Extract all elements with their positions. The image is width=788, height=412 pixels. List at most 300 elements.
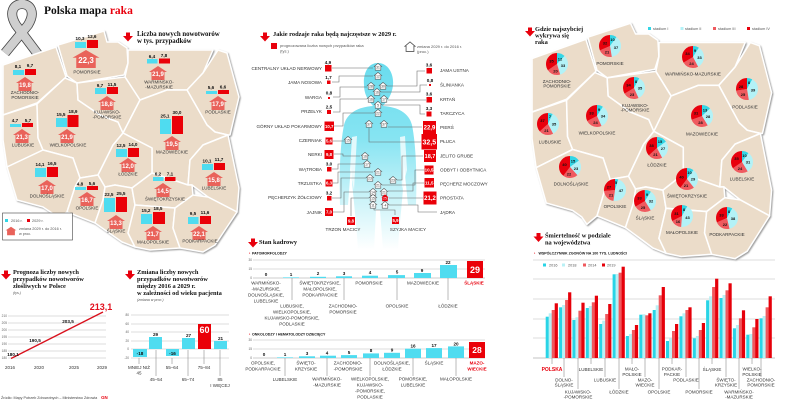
region data: Pomorskie: 22,3 (78, 56, 94, 65)
pie: Wielkopolskie: WIELKOPOLSKIE (579, 130, 615, 136)
legend: cancer types: (proc.) (417, 49, 429, 54)
region data: Świętokrzyskie: 14,5 (157, 189, 169, 195)
map regions (3, 31, 239, 252)
pie: Wielkopolskie: 9 (598, 107, 601, 112)
region data: Kujawsko-Pomorskie (93, 82, 121, 120)
pie: Kujawsko-Pomorskie: 34 (626, 82, 631, 88)
staffing chart: pathologists: 3 (343, 271, 346, 276)
staffing chart: pathologists: 4 (369, 270, 372, 275)
pie: Warmińsko-Mazurskie: 34 (685, 51, 690, 56)
legend: left map: 2029 r. (32, 219, 44, 223)
region data: Dolnośląskie (30, 161, 64, 198)
region data: Zachodniopomorskie: 8,1 (15, 64, 22, 69)
category labels: LUBELSKIE (579, 367, 603, 372)
bar chart: change by age: 20 (125, 339, 129, 343)
region data: Łódzkie: ŁÓDZKIE (118, 170, 138, 176)
left cancer list: 5,6 (326, 138, 333, 144)
heading: change by age: przypadków nowotworów (137, 276, 208, 283)
region data: Podkarpackie: 22,1 (193, 232, 205, 238)
region data: Dolnośląskie: 14,1 (36, 162, 45, 167)
pie: Dolnośląskie (554, 158, 588, 186)
pie: Śląskie: ŚLĄSKIE (636, 214, 654, 220)
category labels: LUBUSKIE (594, 378, 616, 382)
bar chart: change by age: 55–64 (166, 365, 179, 370)
region data: Zachodniopomorskie: 9,7 (27, 63, 34, 68)
region data: Podlaskie (205, 84, 231, 114)
bars: 17 voivodeship groups (546, 267, 772, 358)
region data: Lubelskie (202, 157, 226, 190)
heading: staffing: Stan kadrowy (259, 239, 298, 246)
heading: new cancers: w tys. przypadków (137, 38, 192, 45)
right cancer list: 3,6 (426, 92, 433, 96)
staffing chart: child oncologists: WARMIŃSKO- (312, 376, 342, 382)
change markers on body: 22 (376, 112, 380, 116)
pie: Zachodniopomorskie: POMORSKIE (543, 84, 571, 88)
staffing chart: pathologists: LUBELSKIE (254, 298, 278, 304)
region data: Mazowieckie: MAZOWIECKIE (156, 150, 188, 154)
region data: Podkarpackie: 11,6 (201, 210, 210, 215)
pie: Podkarpackie: PODKARPACKIE (709, 232, 745, 237)
left cancer list: 10,7 (325, 124, 334, 129)
pie: Pomorskie: 10 (610, 37, 615, 42)
region data: Zachodniopomorskie: POMORSKIE (11, 95, 39, 100)
heading: change by age (125, 269, 223, 302)
line chart: forecast: 2020 (34, 365, 45, 370)
left cancer list: TRZON MACICY (326, 227, 360, 232)
staffing chart: child oncologists: MAŁOPOLSKIE (440, 376, 472, 382)
staffing chart: child oncologists: POMORSKIE, (399, 376, 427, 382)
region data: Świętokrzyskie (145, 172, 185, 202)
pie: Łódzkie: 21 (653, 152, 658, 157)
staffing chart: child oncologists: WIECKIE (467, 366, 487, 372)
region data: Podlaskie: 6,6 (220, 84, 227, 90)
staffing chart: child oncologists: ŁÓDZKIE (382, 366, 402, 372)
category labels: PODLASKIE (673, 378, 699, 382)
heading: mortality: na województwa (545, 240, 591, 246)
right cancer list: PĘCHERZ MOCZOWY (440, 182, 488, 186)
category labels: WIECKIE (635, 382, 655, 388)
pie: Kujawsko-Pomorskie: 23 (630, 92, 635, 97)
region data: Śląskie: 22,5 (105, 192, 114, 197)
legend: stages: stadium IV (752, 27, 770, 31)
line chart: forecast: 185 (2, 349, 7, 353)
bar chart: change by age: -18 (137, 351, 144, 356)
left cancer list: TRZUSTKA (298, 181, 323, 186)
region data: Kujawsko-Pomorskie: 9,7 (97, 83, 104, 88)
pie: Podlaskie (732, 80, 758, 110)
right cancer list: PIERŚ (440, 123, 454, 130)
pie: Dolnośląskie: DOLNOŚLĄSKIE (554, 180, 588, 186)
pie: Kujawsko-Pomorskie: KUJAWSKO- (622, 103, 649, 108)
right cancer list: ŚLINIANKA (440, 80, 465, 88)
region data: Podkarpackie (182, 210, 218, 244)
heading: mortality: Śmiertelność w podziale (545, 232, 611, 240)
right cancer list: JĄDRA (440, 210, 456, 215)
region data: Warmińsko-Mazurskie (144, 53, 174, 90)
heading: detection: Gdzie najszybciej (535, 26, 583, 33)
mortality chart: WSPÓŁCZYNNIK ZGONÓW NA 100 TYS. LUDNOŚCI (538, 250, 627, 256)
staffing chart: pathologists: › (249, 250, 251, 256)
bar chart: change by age: -16 (169, 351, 176, 356)
pie: Pomorskie: 21 (605, 50, 610, 54)
left cancer list: 6,3 (326, 180, 333, 186)
pie: Zachodniopomorskie: 33 (561, 63, 566, 68)
pie: Warmińsko-Mazurskie: 33 (697, 55, 702, 60)
heading: detection: wykrywa się (535, 32, 569, 40)
category labels: MAZO- (638, 378, 653, 382)
left cancer list: GÓRNY UKŁAD POKARMOWY (256, 123, 322, 129)
change markers on body: 21 (376, 170, 380, 174)
line chart: forecast: 190,5 (29, 338, 41, 343)
right cancer list: 3,6 (426, 62, 433, 68)
pie: Dolnośląskie: 40 (562, 162, 567, 167)
staffing chart: pathologists: -MAZURSKIE, (251, 286, 281, 292)
pie: Łódzkie: ŁÓDZKIE (647, 162, 667, 168)
pie: Podkarpackie: 8 (728, 209, 731, 214)
region data: Warmińsko-Mazurskie: -MAZURSKIE (145, 84, 173, 90)
category labels: -MAZURSKIE (725, 394, 753, 400)
region data: Małopolskie: MAŁOPOLSKIE (137, 240, 169, 244)
staffing chart: pathologists: LUBUSKIE, (280, 304, 304, 308)
region data: Kujawsko-Pomorskie: KUJAWSKO- (94, 110, 121, 114)
region data: Pomorskie: 10,3 (76, 36, 85, 41)
region data: Świętokrzyskie: 7,1 (167, 172, 174, 176)
region data: Kujawsko-Pomorskie: 18,8 (101, 102, 113, 108)
region data: Lubuskie (10, 118, 34, 148)
title: Polska mapa raka (44, 5, 133, 17)
region data: Świętokrzyskie: ŚWIĘTOKRZYSKIE (145, 194, 185, 202)
region data: Wielkopolskie: 15,5 (57, 112, 66, 117)
pie: Wielkopolskie: 33 (589, 110, 594, 116)
category labels: ŚWIĘTO- (716, 376, 736, 382)
pie: Świętokrzyskie: ŚWIĘTOKRZYSKIE (667, 192, 707, 198)
map regions (right) (532, 23, 772, 259)
left cancer list: WARGA (305, 95, 323, 100)
pie: Podlaskie: 39 (751, 88, 756, 92)
region data: Kujawsko-Pomorskie: -POMORSKIE (93, 114, 121, 120)
staffing chart: child oncologists: 1 (284, 352, 287, 357)
change markers on body: 14 (371, 190, 375, 194)
staffing chart: child oncologists (245, 332, 487, 400)
bar chart: change by age: 0 (127, 347, 129, 351)
pie: Podkarpackie: 33 (719, 212, 724, 218)
change markers on body: 12 (376, 74, 380, 78)
heading: mortality (534, 232, 611, 246)
line chart: forecast: 2029 (97, 365, 108, 370)
change markers on body: 28 (369, 84, 373, 88)
line chart: forecast: 2025 (69, 365, 80, 370)
pie: Warmińsko-Mazurskie: 9 (694, 48, 697, 53)
pie: Podlaskie: PODLASKIE (732, 104, 758, 110)
pie: Małopolskie: MAŁOPOLSKIE (666, 230, 698, 235)
staffing chart: child oncologists: -MAZURSKIE (313, 382, 341, 388)
line chart: forecast: 205 (2, 321, 7, 325)
right cancer list: KRTAŃ (440, 96, 455, 102)
heading: forecast: Prognoza liczby nowych (13, 269, 79, 276)
staffing chart: pathologists: WARMIŃSKO- (251, 280, 281, 286)
change markers on body: 25 (383, 196, 387, 200)
left cancer list: 3,0 (326, 162, 333, 166)
region data: Małopolskie: 21,7 (147, 232, 159, 238)
region data: Wielkopolskie: WIELKOPOLSKIE (50, 142, 86, 148)
change markers on body: 5 (377, 104, 379, 108)
staffing chart: pathologists: POMORSKIE (355, 280, 383, 286)
bar chart: change by age: 21 (218, 336, 223, 341)
legend: left map: 2016 r. (11, 219, 23, 223)
staffing chart: child oncologists: ŚLĄSKIE (425, 358, 443, 366)
left cancer list: 1,7 (325, 75, 332, 80)
line chart: forecast: 213,1 (90, 302, 112, 312)
staffing chart: pathologists: DOLNOŚLĄSKIE, (248, 290, 284, 298)
bar chart: change by age: I WIĘCEJ (210, 383, 230, 388)
region data: Kujawsko-Pomorskie: 11,5 (108, 82, 117, 87)
pie: Małopolskie: 16 (676, 219, 681, 224)
pie: Łódzkie: 38 (649, 143, 654, 148)
change markers on body: 17 (382, 98, 386, 102)
mortality chart: › (534, 250, 536, 256)
change markers on body: 21 (376, 184, 380, 188)
pie: Śląskie: 32 (649, 198, 654, 204)
region data: Małopolskie (137, 206, 169, 244)
region data: Lubelskie: 11,7 (215, 157, 224, 162)
region data: Opolskie: 4,8 (77, 182, 84, 186)
legend: stages: stadium III (718, 27, 736, 31)
right cancer list: SZYJKA MACICY (390, 227, 426, 232)
change markers on body: 11 (371, 204, 375, 208)
region data: Opolskie (75, 181, 98, 210)
bar chart: change by age: 85 (217, 377, 223, 382)
region data: Opolskie: 5,6 (89, 181, 96, 186)
legend: left map: zmiana 2029 r. do 2016 r. (19, 227, 62, 231)
mortality chart (533, 250, 776, 400)
pie: Świętokrzyskie (667, 170, 707, 198)
staffing chart: child oncologists: 17 (431, 343, 437, 348)
pie: Lubelskie: LUBELSKIE (730, 176, 754, 182)
region data: Śląskie: 25,5 (117, 191, 126, 196)
region data: Lubuskie: 5,7 (25, 118, 32, 123)
staffing chart: child oncologists: 4 (326, 350, 329, 356)
left cancer list: 0,8 (326, 90, 333, 96)
staffing chart: child oncologists: 0 (263, 352, 266, 357)
staffing chart: child oncologists: -POMORSKIE, (355, 388, 385, 394)
staffing chart: child oncologists: PODLASKIE (357, 394, 383, 400)
pie: Zachodniopomorskie (543, 56, 572, 88)
region data: Świętokrzyskie: 6,2 (155, 172, 162, 176)
category labels: OPOLSKIE (648, 390, 670, 394)
region data: Wielkopolskie: 18,9 (69, 109, 78, 114)
line chart: forecast: 180,1 (7, 352, 19, 357)
staffing chart: child oncologists: 9 (391, 348, 394, 352)
pie: Śląskie: 33 (637, 196, 642, 200)
heading: forecast: (tys.) (13, 291, 21, 295)
pie: Lubuskie: 35 (552, 122, 557, 126)
category labels: DOLNO- (555, 378, 573, 382)
staffing chart: pathologists: ŚLĄSKIE (464, 280, 484, 286)
staffing chart: pathologists: 5 (396, 270, 399, 274)
staffing chart: child oncologists: 20 (453, 342, 459, 346)
right cancer list: 21,2 (424, 196, 436, 202)
region data: Podkarpackie: PODKARPACKIE (182, 238, 218, 244)
region data: Mazowieckie: 19,5 (166, 142, 178, 148)
line chart: forecast: 2016 (5, 365, 16, 370)
change markers on body: 37 (367, 122, 371, 126)
staffing chart: child oncologists: ZACHODNIO- (334, 360, 363, 366)
category labels: ŚLĄSKIE (703, 365, 721, 372)
staffing chart: pathologists: 29 (470, 265, 480, 275)
legend: left map: w proc. (19, 232, 31, 236)
legend: stages: stadium II (685, 27, 701, 31)
pie: Pomorskie: POMORSKIE (596, 61, 624, 66)
staffing chart: pathologists: KUJAWSKO-POMORSKIE, (264, 316, 320, 320)
pie: Podkarpackie: 22 (723, 222, 728, 227)
heading: staffing (248, 238, 298, 248)
staffing chart: pathologists: POMORSKIE (329, 310, 357, 314)
category labels: KUJAWSKO- (565, 390, 592, 394)
legend: stages: stadium I (653, 27, 668, 31)
bar chart: change by age (124, 313, 230, 388)
pie: Małopolskie: 43 (685, 215, 690, 220)
line chart: forecast: 200 (2, 328, 7, 332)
staffing chart: pathologists: ZACHODNIO- (329, 304, 358, 308)
bar chart: change by age: 60 (199, 325, 210, 335)
staffing chart: child oncologists: ŚWIĘTO- (296, 358, 316, 366)
pie: Podlaskie: 28 (739, 84, 744, 89)
region data: Łódzkie (116, 142, 139, 176)
legend: cancer types: (tys.) (280, 48, 290, 54)
staffing chart: pathologists: 15 (248, 267, 252, 271)
pie: Śląskie: 25 (641, 205, 646, 210)
pie: Świętokrzyskie: 40 (679, 174, 684, 180)
staffing chart: pathologists: 1 (290, 272, 293, 277)
region data: Łódzkie: 12,5 (117, 143, 126, 148)
pie: Łódzkie: 15 (658, 139, 663, 144)
bar chart: change by age: 29 (153, 332, 158, 337)
pie: Małopolskie (666, 207, 698, 235)
staffing chart: pathologists: 30 (248, 258, 252, 262)
bar chart: change by age: 45 (136, 370, 142, 376)
region data: Lubuskie: 4,7 (12, 118, 19, 123)
category labels: POLSKA (542, 367, 563, 373)
line chart: forecast: 195 (2, 335, 7, 339)
staffing chart: pathologists: 2 (317, 271, 320, 276)
heading: forecast: przypadków nowotworów (13, 276, 84, 283)
region data: Podlaskie: 5,6 (208, 85, 215, 90)
staffing chart: pathologists: PATOMORFOLODZY (252, 252, 288, 256)
legend: stages (648, 27, 770, 31)
change markers on body: 31 (376, 66, 380, 70)
pie: Zachodniopomorskie: 12 (558, 56, 563, 62)
region data: Podkarpackie: 9,5 (190, 211, 197, 216)
pie: Lubuskie: 21 (544, 128, 549, 133)
right cancer list (390, 62, 488, 232)
pie: Opolskie: 47 (619, 188, 624, 193)
region data: Śląskie: 13,3 (110, 221, 122, 227)
staffing chart: child oncologists: ONKOLODZY I HEMATOLODZY DZIECIĘCY (252, 332, 326, 336)
staffing chart: pathologists: 0 (265, 272, 268, 277)
legend: cancer types: prognozowana liczba nowych przypadków raka (280, 43, 364, 48)
pie: Śląskie (636, 192, 654, 220)
heading: change by age: między 2016 a 2029 r. (137, 283, 196, 290)
region data: Łódzkie: 12,0 (122, 164, 134, 170)
mortality legend: 2016 (549, 264, 557, 268)
staffing chart: child oncologists: 0 (250, 356, 252, 360)
pie: Kujawsko-Pomorskie: -POMORSKIE (621, 108, 649, 112)
right cancer list: PROSTATA (440, 196, 465, 200)
left cancer list: 9,8 (348, 218, 355, 224)
change markers on body: 23 (391, 178, 395, 182)
region data: Zachodniopomorskie (11, 63, 40, 100)
pie: Wielkopolskie: 34 (601, 114, 606, 118)
left cancer list: 7,0 (326, 210, 333, 214)
staffing chart: pathologists: 22 (445, 260, 451, 265)
category labels: PODKAR- (662, 366, 683, 372)
heading: forecast: złośliwych w Polsce (13, 283, 66, 290)
pie: Lubuskie: 7 (549, 114, 552, 119)
staffing chart: pathologists: PODKARPACKIE (302, 292, 338, 298)
category labels: ZACHODNIO- (747, 378, 776, 382)
pie: Kujawsko-Pomorskie: 35 (638, 86, 643, 90)
bar chart: change by age: -20 (124, 356, 129, 360)
change markers on body: 16 (369, 98, 373, 102)
staffing chart: pathologists: PODLASKIE (279, 322, 305, 326)
pie: Mazowieckie (686, 108, 718, 136)
pie: Mazowieckie: MAZOWIECKIE (686, 132, 718, 136)
region data: Warmińsko-Mazurskie: 21,9 (152, 72, 164, 78)
pie: Wielkopolskie (579, 107, 615, 136)
region data: Lubuskie: 21,3 (16, 135, 28, 141)
category labels: POLSKIE (622, 372, 642, 377)
mortality legend: 2019 (607, 264, 615, 268)
bar chart: change by age: 75–84 (198, 365, 211, 370)
pie: Małopolskie: 8 (683, 207, 686, 212)
pie: Kujawsko-Pomorskie: 8 (635, 79, 638, 84)
pie: Dolnośląskie: 15 (571, 158, 576, 164)
bar chart: change by age: MNIEJ NIŻ (128, 364, 150, 370)
change markers on body: 15 (346, 138, 350, 142)
pie: Lubuskie (539, 114, 561, 144)
source: Źródło: Mapy Potrzeb Zdrowotnych – Ministerstwo Zdrowia GN (1, 395, 108, 400)
region data: Mazowieckie: 30,0 (173, 110, 182, 115)
pie: Warmińsko-Mazurskie (665, 48, 721, 76)
region data: Warmińsko-Mazurskie: 6,4 (149, 54, 156, 59)
region data: Małopolskie: 18,5 (154, 206, 163, 211)
heading: new cancers: Liczba nowych nowotworów (137, 31, 220, 38)
pie: Mazowieckie: 31 (694, 110, 699, 116)
category labels: POMORSKIE (747, 382, 775, 388)
staffing chart: child oncologists: 16 (410, 344, 416, 348)
bar chart: change by age: 40 (125, 330, 129, 334)
pie: Pomorskie: 32 (603, 40, 608, 46)
pie: Świętokrzyskie: 21 (684, 183, 689, 188)
staffing chart: pathologists: ŚWIĘTOKRZYSKIE, (299, 278, 341, 286)
staffing chart: child oncologists: DOLNOŚLĄSKIE, (374, 358, 410, 366)
pie: Zachodniopomorskie: ZACHODNIO- (543, 79, 572, 84)
pie: Lubelskie: 31 (746, 160, 751, 164)
region data: Zachodniopomorskie: 19,8 (19, 83, 31, 89)
region data: Opolskie: 16,7 (81, 198, 93, 204)
heading: forecast (1, 269, 84, 295)
category labels: POMORSKIE (685, 390, 713, 394)
pie: Podlaskie: 25 (741, 92, 746, 97)
pie: Lubelskie: 24 (738, 166, 743, 171)
staffing chart: child oncologists: KRZYSKIE (295, 366, 317, 372)
bar chart: change by age: 45–54 (150, 377, 163, 382)
pie: Świętokrzyskie: 10 (687, 170, 692, 175)
mortality legend: 2018 (568, 264, 576, 268)
bar chart: change by age: 65–74 (182, 377, 195, 382)
staffing chart: pathologists: 0 (250, 276, 252, 280)
staffing chart: child oncologists: -POMORSKIE (334, 366, 362, 372)
